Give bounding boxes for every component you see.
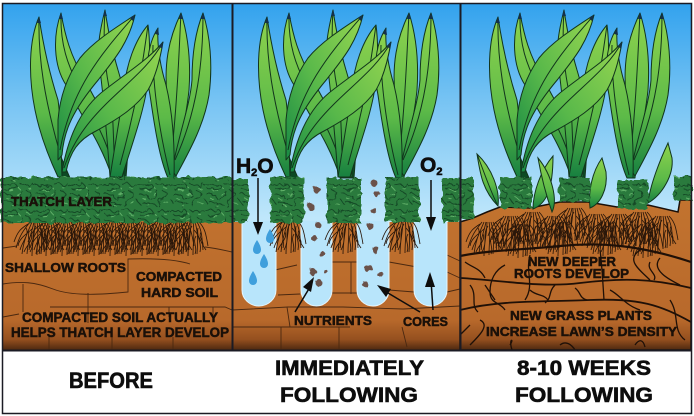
- panel: before: [1, 3, 232, 350]
- arrow: cores: [377, 285, 420, 312]
- label: nutrients: NUTRIENTS: [294, 313, 372, 328]
- label: new grass plants: [486, 308, 677, 339]
- aeration holes: [242, 221, 447, 306]
- caption: before: BEFORE: [69, 368, 153, 393]
- nutrient and core particles: [308, 180, 383, 287]
- label: compacted soil note: [11, 310, 229, 340]
- label: new grass plants: INCREASE LAWN’S DENSITY: [486, 324, 677, 339]
- arrow: cores up: [425, 272, 435, 310]
- label: new deeper roots: ROOTS DEVELOP: [514, 266, 629, 281]
- label: compacted soil note: HELPS THATCH LAYER DEVELOP: [11, 325, 229, 340]
- label: H2O: O: [257, 155, 274, 178]
- thatch plugs: [231, 177, 461, 223]
- sky background: [232, 3, 460, 228]
- caption: 8-10 weeks following: FOLLOWING: [515, 384, 653, 407]
- label: H2O: H: [236, 155, 251, 178]
- caption: 8-10 weeks following: 8-10 WEEKS: [517, 357, 651, 380]
- new deeper roots: [460, 208, 691, 350]
- soil layer: [3, 220, 232, 350]
- label: shallow roots: SHALLOW ROOTS: [5, 260, 126, 275]
- arrow: oxygen down: [426, 180, 436, 231]
- caption: immediately following: FOLLOWING: [280, 384, 418, 407]
- label: compacted soil note: COMPACTED SOIL ACTUALLY: [22, 310, 218, 325]
- label: cores: CORES: [403, 314, 448, 329]
- soil layer: [460, 200, 691, 350]
- thatch layer: [1, 177, 232, 223]
- label: new deeper roots: NEW DEEPER: [528, 254, 617, 269]
- caption: immediately following: IMMEDIATELY: [275, 357, 424, 380]
- label: O2: O: [420, 154, 436, 177]
- arrow: nutrients: [295, 277, 314, 312]
- soil cracks: [3, 246, 232, 350]
- sky background: [3, 3, 232, 183]
- illustration: grass plants: [258, 10, 439, 178]
- label: compacted hard soil: HARD SOIL: [141, 285, 218, 300]
- label: new deeper roots: [514, 254, 629, 281]
- caption: immediately following: [275, 357, 424, 407]
- root plugs: [268, 220, 420, 254]
- panel: 8-10 weeks following: [459, 3, 692, 350]
- label: thatch layer: THATCH LAYER: [11, 194, 113, 209]
- sky background: [460, 3, 692, 228]
- thatch plugs: [459, 176, 692, 220]
- new small grass plants: [477, 143, 672, 212]
- water droplets: [249, 229, 274, 285]
- soil cracks: [232, 255, 460, 349]
- label: O2: 2: [436, 166, 442, 178]
- label: H2O: 2: [251, 167, 257, 179]
- illustration: grass plants: [489, 10, 670, 178]
- shallow roots: [14, 222, 208, 256]
- panel: immediately following: [231, 3, 461, 350]
- arrow: water down: [253, 178, 263, 235]
- label: compacted hard soil: [136, 269, 222, 300]
- soil layer: [232, 222, 460, 350]
- illustration: grass plants: [30, 10, 211, 178]
- label: compacted hard soil: COMPACTED: [136, 269, 222, 284]
- label: new grass plants: NEW GRASS PLANTS: [510, 308, 652, 323]
- caption: 8-10 weeks following: [515, 357, 653, 407]
